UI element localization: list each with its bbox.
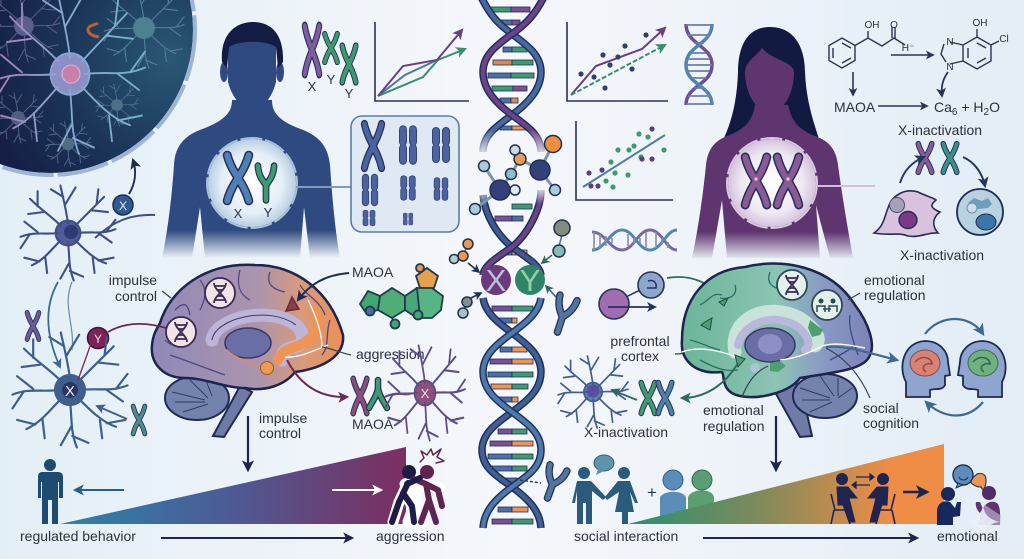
- leaders and labels: right brain: emotional: [703, 402, 764, 418]
- arrow and label: impulse control down: control: [259, 425, 301, 441]
- label: social interaction: social interaction: [574, 528, 678, 544]
- diagram: chemical reaction: N: [946, 37, 954, 48]
- icon: lower Y chromosome with dashed link: [520, 465, 567, 501]
- label: prefrontal cortex: prefrontal: [610, 333, 670, 349]
- illustration: central DNA double helix: [472, 0, 552, 528]
- icon: X Y Y chromosomes: [305, 26, 356, 101]
- leaders and labels: right brain: emotional: [864, 272, 925, 288]
- diagram: chemical reaction: H⁻: [902, 43, 914, 54]
- figure: male silhouette: X: [234, 206, 243, 221]
- text: X-inactivation lower: X-inactivation: [900, 247, 984, 263]
- icon: XY badges on the helix: [481, 263, 545, 298]
- diagram: chemical reaction: Cl: [999, 34, 1009, 45]
- icon: two heads with brains: [902, 319, 1006, 416]
- chart: diverging lines: [375, 22, 469, 101]
- figure: male silhouette: [162, 22, 352, 258]
- icon: lower-left neuron: X: [65, 383, 75, 400]
- icon: X and lambda chromosomes with purple neuron: X: [421, 386, 430, 401]
- icon: XY badges on the helix: X: [486, 263, 507, 298]
- leaders and labels: right brain: regulation: [864, 287, 926, 303]
- text: X-inactivation upper: X-inactivation: [898, 122, 982, 138]
- label: regulated behavior: regulated behavior: [20, 528, 136, 544]
- icon: green molecule: [360, 264, 443, 328]
- diagram: chemical reaction: [829, 18, 1009, 118]
- label: aggression axis: aggression: [376, 528, 444, 544]
- labels and arrows: left brain: control: [115, 288, 157, 304]
- diagram: chemical reaction: N: [946, 62, 954, 73]
- arrow: seated to emotional: [903, 491, 927, 493]
- arrow and label: impulse control down: impulse: [259, 410, 307, 426]
- label: X-inactivation mid: X-inactivation: [584, 424, 668, 440]
- icon: emotional pair with speech bubbles: [937, 465, 1000, 538]
- diagram: chemical reaction: 2: [984, 107, 990, 118]
- icon: neuron top-left with X badge: [20, 160, 155, 280]
- labels and arrows: left brain: impulse: [109, 272, 157, 288]
- icon: X Y Y chromosomes: X: [308, 79, 317, 94]
- brain: left male, orange prefrontal: [152, 265, 343, 437]
- diagram: chemical reaction: 6: [952, 107, 958, 118]
- chart: scatter with regression line: [576, 121, 673, 200]
- icon: small vertical DNA: [686, 24, 712, 105]
- diagram: chemical reaction: OH: [972, 18, 988, 29]
- icon: lower-left neuron: [13, 282, 145, 448]
- diagram: chemical reaction: OH: [864, 20, 880, 31]
- labels and arrows: left brain: aggression: [356, 346, 424, 362]
- figure: male silhouette: Y: [264, 205, 273, 220]
- leaders and labels: right brain: cognition: [863, 415, 919, 431]
- leaders and labels: right brain: social: [863, 400, 899, 416]
- panel: neural network magnified circle: [0, 0, 195, 175]
- text: MAOA lower: MAOA: [352, 416, 394, 432]
- label: emotional: emotional: [937, 528, 998, 544]
- labels and arrows: left brain: Y: [94, 332, 102, 346]
- diagram: chemical reaction: Ca: [934, 99, 952, 115]
- bar: social-to-emotional wedge: [628, 444, 944, 524]
- panel: karyotype: [351, 116, 459, 232]
- icon: small horizontal DNA: [592, 230, 677, 250]
- arrow: brain to paired heads: [826, 347, 897, 360]
- arrow: right axis: [703, 537, 917, 539]
- chart: scatter with trend lines: [567, 22, 668, 101]
- icon: fighting figures: [392, 449, 444, 522]
- diagram: chemical reaction: O: [989, 99, 1000, 115]
- diagram: chemical reaction: MAOA: [834, 99, 876, 115]
- figure: female silhouette: [692, 27, 875, 258]
- leaders and labels: right brain: regulation: [703, 418, 764, 434]
- label: prefrontal cortex: [610, 333, 700, 364]
- icon: mid right neuron and XX chromosomes: [558, 356, 738, 428]
- icon: X Y Y chromosomes: Y: [327, 72, 336, 87]
- arrow: white in left wedge: [332, 489, 381, 491]
- icon: seated conversation: [831, 474, 895, 524]
- arrow: left axis: [161, 537, 352, 539]
- icon: two spheres with arrow: [599, 272, 721, 319]
- icon: neuron top-left with X badge: X: [119, 199, 127, 213]
- brain: right female, green prefrontal: [682, 264, 872, 437]
- icon: small molecules with arrows around badges: [450, 220, 577, 335]
- arrow and label: impulse control down: [248, 410, 307, 470]
- icon: central molecule: [470, 136, 562, 214]
- diagram: X-inactivation cell cycle: [874, 144, 1003, 236]
- diagram: chemical reaction: O: [890, 20, 898, 31]
- bar: regulated-to-aggression wedge: [60, 447, 406, 524]
- icon: two people talking, plus, two faces: [572, 455, 714, 524]
- icon: X and lambda chromosomes with purple neuron: [353, 346, 465, 440]
- labels and arrows: left brain: MAOA: [352, 264, 394, 280]
- arrow: emotional regulation down: [775, 416, 777, 470]
- arrow: to regulated behaviour: [75, 489, 124, 491]
- icon: standing person: [38, 459, 63, 524]
- icon: two people talking, plus, two faces: +: [647, 483, 657, 502]
- label: prefrontal cortex: cortex: [621, 348, 659, 364]
- icon: X Y Y chromosomes: Y: [345, 86, 354, 101]
- icon: XY badges on the helix: Y: [520, 263, 540, 298]
- diagram: chemical reaction: + H: [957, 99, 984, 115]
- labels and arrows: left brain: [88, 264, 424, 397]
- leaders and labels: right brain: [703, 272, 926, 434]
